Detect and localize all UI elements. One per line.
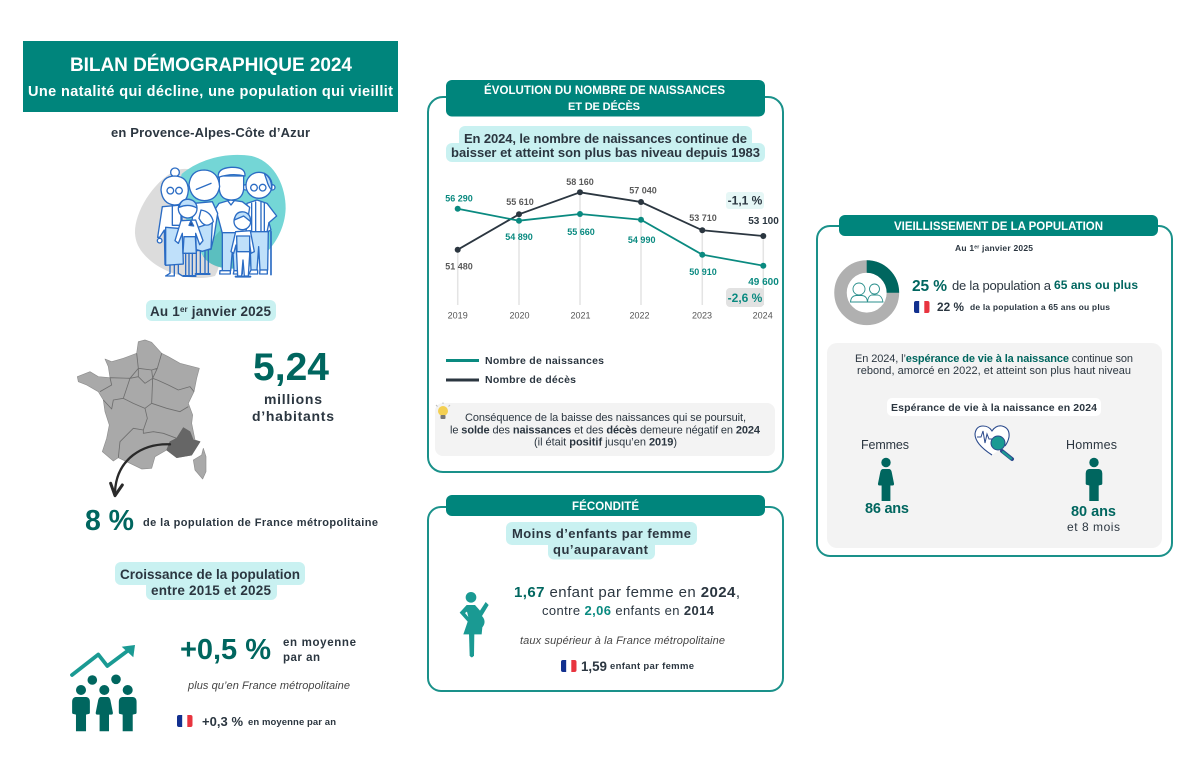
women [861,438,909,517]
pill: date: er [180,305,188,314]
icon: light bulb [436,402,450,419]
note box: le solde des naissances et des décès demeure négatif en 2024 [450,424,761,436]
key message pill [446,126,765,162]
pill: population growth [115,562,305,600]
legend: Nombre de naissances [485,355,604,367]
text: life expectancy: rebond, amorcé en 2022, et atteint son plus haut niveau [857,365,1131,377]
stat: France share aged 65+: 22 % [937,300,964,314]
boy [231,212,254,277]
stat: fertility rate: 1,67 enfant par femme en 2024, [514,584,740,601]
legend: Nombre de décès [485,374,576,386]
panel: ageing [817,215,1172,556]
panel: fertility [428,495,783,691]
panel header [839,215,1158,236]
data labels: 55 610 [506,197,534,207]
men: 80 ans [1071,504,1116,520]
stat: fertility rate [514,584,740,647]
change badge: births [726,288,764,307]
note box [435,403,775,456]
stat: fertility rate: taux supérieur à la France métropolitaine [520,635,725,647]
pill: population growth: Croissance de la population [120,567,300,582]
key message pill [506,522,697,560]
x axis years: 2022 [629,311,650,321]
pill: date: Au 1 [150,304,180,319]
data labels: 54 890 [505,232,533,242]
stat: growth rate: plus qu’en France métropolitaine [187,680,350,692]
stat: fertility rate: contre 2,06 enfants en 2014 [542,603,715,618]
sub-heading pill [887,398,1101,416]
title banner [23,41,398,112]
text: life expectancy: En 2024, l’espérance de vie à la naissance continue son [855,353,1133,365]
life expectancy box [827,343,1162,548]
mother [189,170,220,274]
key message pill: qu’auparavant [553,542,649,557]
map of France with highlighted region [77,340,206,496]
date label: er [974,244,979,250]
data labels: 56 290 [445,194,473,204]
stat: share aged 65+: de la population a [952,278,1052,293]
stat: population: d’habitants [252,408,334,424]
icon: family illustration [135,155,286,278]
donut chart: 25 % [840,266,893,319]
subtitle: region: en Provence-Alpes-Côte d’Azur [111,125,310,140]
note box: (il était positif jusqu’en 2019) [534,436,677,448]
panel: births and deaths [428,80,783,472]
change badge: births: -2,6 % [728,291,763,305]
sub-heading pill: Espérance de vie à la naissance en 2024 [891,402,1097,414]
stat: growth rate: en moyenne [283,637,356,649]
women: Femmes [861,438,909,452]
men [1066,438,1120,534]
data labels: 53 710 [689,213,717,223]
panel header: FÉCONDITÉ [572,500,639,513]
men: et 8 mois [1067,520,1120,534]
pill: date [146,300,276,321]
title banner: Une natalité qui décline, une population qui vieillit [28,84,393,100]
grandmother [157,168,188,276]
x axis years: 2021 [570,311,591,321]
stat: France growth comparison [177,714,336,729]
grandfather [243,172,277,275]
date label: Au 1 [955,243,974,253]
stat: population: 5,24 [253,346,329,389]
key message pill: Moins d’enfants par femme [512,526,691,541]
x axis years [448,311,773,321]
icon: elderly couple [850,283,883,302]
line chart [445,177,779,321]
stat: France share aged 65+: de la population a 65 ans ou plus [970,302,1110,312]
data labels: 55 660 [567,227,595,237]
stat: France growth comparison: +0,3 % [202,714,243,729]
data labels: 51 480 [445,262,473,272]
father [216,167,250,274]
stat: share aged 65+: 65 ans ou plus [1054,278,1138,292]
change badge: deaths: -1,1 % [728,194,763,208]
icon: pregnant woman [460,592,489,657]
stat: France fertility comparison: 1,59 [581,659,607,674]
note box: Conséquence de la baisse des naissances qui se poursuit, [465,412,746,424]
text: life expectancy [855,353,1133,377]
stat: France fertility comparison [561,659,694,674]
pill: population growth: entre 2015 et 2025 [151,583,271,598]
key message pill: baisser et atteint son plus bas niveau depuis 1983 [451,145,760,160]
data labels: 54 990 [628,235,655,245]
x axis years: 2020 [509,311,530,321]
key message pill: En 2024, le nombre de naissances continue de [464,131,747,146]
x axis years: 2024 [753,311,773,321]
data labels: 58 160 [566,177,594,187]
men: Hommes [1066,438,1117,452]
panel header [446,495,765,516]
stat: share of France: de la population de France métropolitaine [143,517,378,529]
girl [175,199,203,276]
stat: France share aged 65+ [914,300,1110,314]
legend [446,355,604,386]
stat: share aged 65+ [912,278,1138,295]
x axis years: 2019 [448,311,468,321]
icon: heart with magnifier [975,426,1012,459]
stat: France fertility comparison: enfant par femme [610,661,694,672]
stat: share of France [85,505,378,537]
pill: date: janvier 2025 [188,304,271,319]
stat: population: millions [264,391,322,407]
icon: growing population [72,645,137,731]
panel header: ET DE DÉCÈS [568,100,640,113]
title banner: BILAN DÉMOGRAPHIQUE 2024 [70,54,352,76]
women: 86 ans [865,501,909,517]
panel header: VIEILLISSEMENT DE LA POPULATION [894,221,1103,233]
date label: janvier 2025 [979,243,1033,253]
data labels: 57 040 [629,186,657,196]
data labels [445,177,779,288]
stat: growth rate: par an [283,652,320,664]
data labels: 49 600 [748,277,779,288]
series: deaths [455,189,766,253]
panel header [446,80,765,116]
stat: growth rate: +0,5 % [180,634,271,666]
data labels: 53 100 [748,216,779,227]
stat: share of France: 8 % [85,505,134,537]
stat: growth rate [180,634,356,692]
stat: share aged 65+: 25 % [912,278,947,295]
series: births [455,206,766,269]
stat: France growth comparison: en moyenne par an [248,717,336,728]
data labels: 50 910 [689,267,717,277]
panel header: ÉVOLUTION DU NOMBRE DE NAISSANCES [484,84,725,97]
x axis years: 2023 [692,311,712,321]
stat: population [252,346,334,424]
